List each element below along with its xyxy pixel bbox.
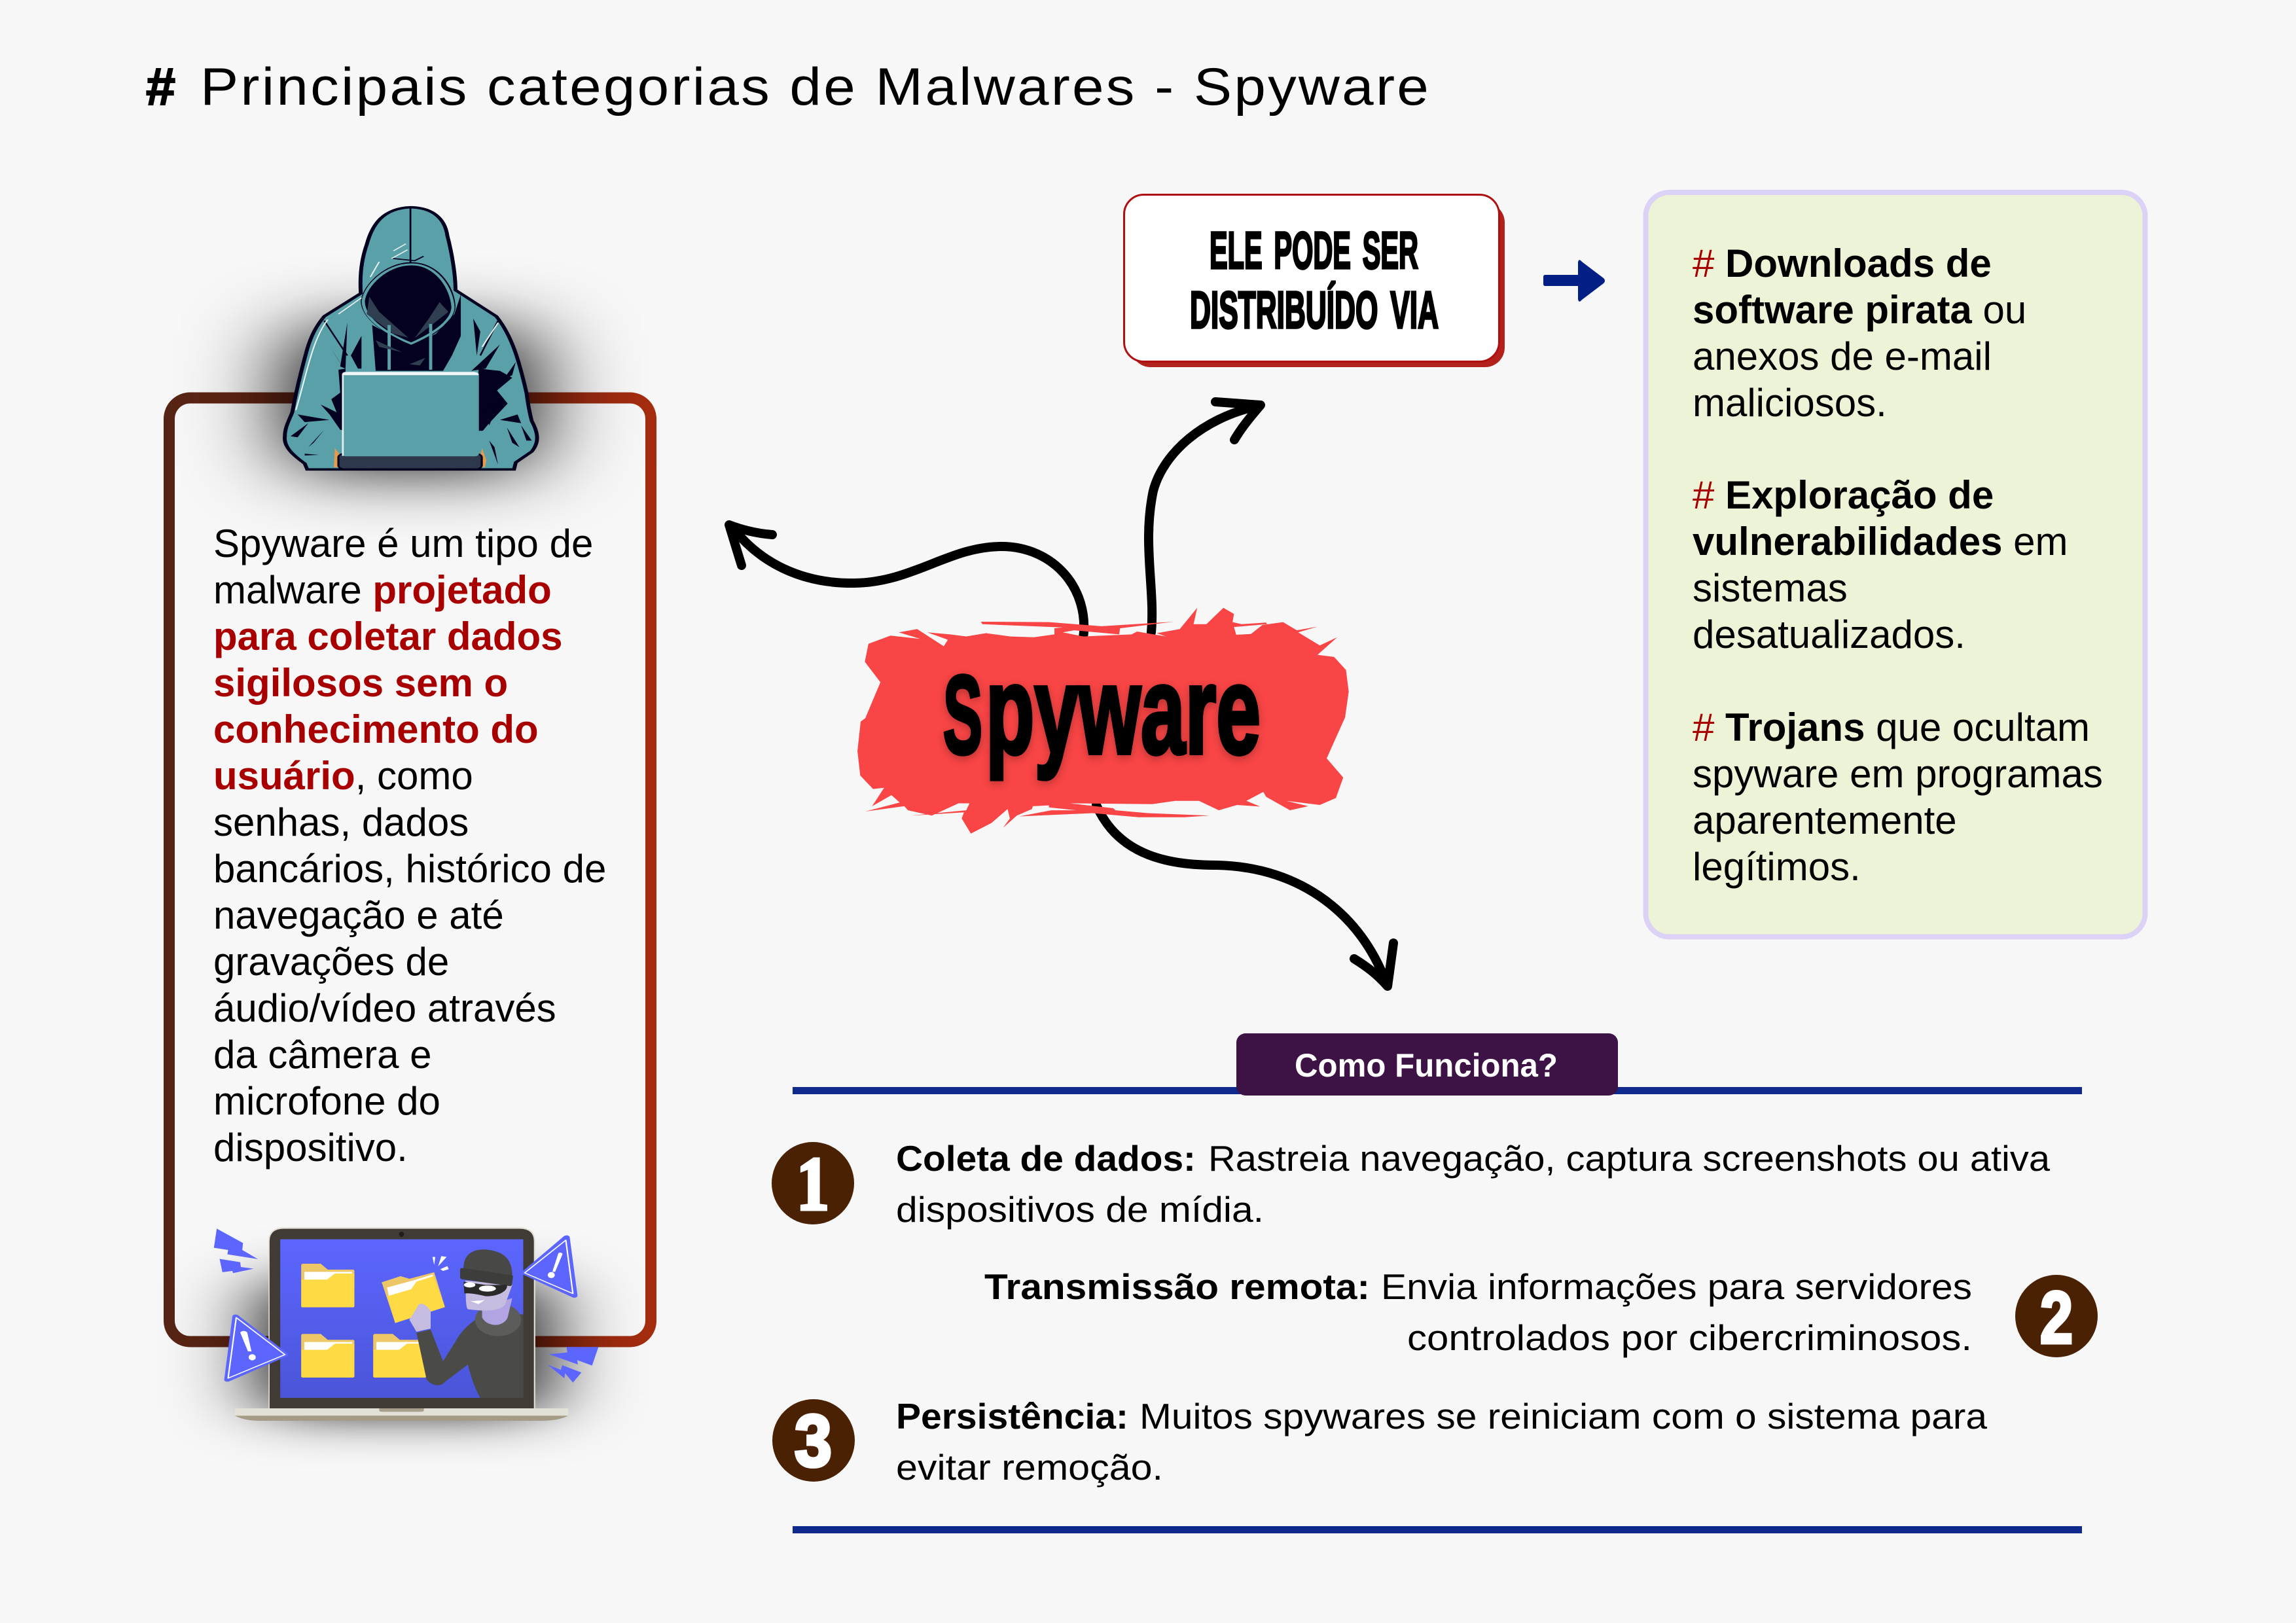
arrow: to how it works: [1096, 805, 1393, 986]
step 1: Coleta de dados:: [896, 1138, 1196, 1179]
list item: trojans: legítimos.: [1693, 845, 1861, 889]
text block: spyware definition: bancários, histórico de: [213, 847, 606, 891]
text block: spyware definition: para coletar dados: [213, 615, 563, 658]
icon: laptop with thief and folders: [214, 1227, 598, 1421]
list item: vulnerabilities: desatualizados.: [1693, 613, 1965, 656]
list item: downloads: maliciosos.: [1693, 381, 1887, 425]
step 1: 1: [797, 1142, 829, 1226]
title: Principais categorias de Malwares - Spyware: [200, 58, 1431, 116]
central brush shape: [857, 608, 1349, 834]
callout: distribution box: [1124, 195, 1505, 367]
text block: spyware definition: navegação e até: [213, 893, 504, 937]
text block: spyware definition: áudio/vídeo através: [213, 986, 556, 1030]
step 3: Persistência:: [896, 1396, 1128, 1436]
lightning bolts: [214, 1228, 598, 1383]
icon: hooded hacker with laptop: [285, 207, 537, 469]
list item: trojans: aparentemente: [1693, 798, 1957, 842]
callout: distribution box: DISTRIBUÍDO VIA: [1190, 281, 1439, 339]
text block: spyware definition: conhecimento do: [213, 707, 539, 751]
list item: downloads: software pirata ou: [1693, 288, 2026, 332]
text block: spyware definition: malware projetado: [213, 568, 552, 612]
step 1: Rastreia navegação, captura screenshots ou ativa: [1208, 1138, 2050, 1179]
text block: spyware definition: gravações de: [213, 940, 449, 984]
text block: spyware definition: Spyware é um tipo de: [213, 522, 593, 565]
step 3: [772, 1396, 1987, 1488]
text block: spyware definition: sigilosos sem o: [213, 661, 508, 705]
callout: distribution box: ELE PODE SER: [1210, 221, 1418, 279]
arrow: to distribution box: [1149, 402, 1261, 632]
heading badge: como funciona: [1236, 1033, 1618, 1096]
text block: spyware definition: senhas, dados: [213, 800, 469, 844]
list item: vulnerabilities: # Exploração de: [1693, 473, 1994, 517]
step 3: Muitos spywares se reiniciam com o sistema para: [1139, 1396, 1987, 1436]
heading badge: como funciona: Como Funciona?: [1295, 1047, 1558, 1084]
list item: downloads: anexos de e-mail: [1693, 334, 1992, 378]
step 3: evitar remoção.: [896, 1447, 1163, 1488]
list item: downloads: # Downloads de: [1693, 241, 1992, 285]
step 1: dispositivos de mídia.: [896, 1189, 1264, 1230]
list item: vulnerabilities: sistemas: [1693, 566, 1848, 610]
step 2: Envia informações para servidores: [1381, 1266, 1972, 1307]
step 2: 2: [2040, 1277, 2073, 1359]
central title: Spyware: pyware: [986, 641, 1261, 780]
panel: definition frame: [169, 398, 651, 1342]
central title: Spyware: S: [943, 653, 982, 777]
arrow: to left panel: [729, 525, 1084, 638]
step 2: [984, 1266, 2098, 1359]
panel: distribution list: [1645, 192, 2145, 937]
list item: trojans: spyware em programas: [1693, 752, 2103, 796]
list item: trojans: # Trojans que ocultam: [1693, 705, 2090, 749]
step 1: [772, 1138, 2050, 1230]
list item: trojans: [1693, 705, 2103, 889]
text block: spyware definition: dispositivo.: [213, 1126, 408, 1169]
list item: vulnerabilities: vulnerabilidades em: [1693, 520, 2068, 563]
text block: spyware definition: [213, 522, 606, 1169]
text block: spyware definition: microfone do: [213, 1079, 440, 1123]
arrow: distribution to list: [1543, 260, 1605, 302]
step 3: 3: [795, 1400, 832, 1482]
title: #: [146, 58, 175, 116]
text block: spyware definition: usuário, como: [213, 754, 473, 798]
list item: vulnerabilities: [1693, 473, 2068, 656]
text block: spyware definition: da câmera e: [213, 1033, 432, 1077]
list item: downloads: [1693, 241, 2026, 425]
warning triangles: [227, 1238, 575, 1380]
step 2: controlados por cibercriminosos.: [1407, 1317, 1972, 1358]
step 2: Transmissão remota:: [984, 1266, 1370, 1307]
